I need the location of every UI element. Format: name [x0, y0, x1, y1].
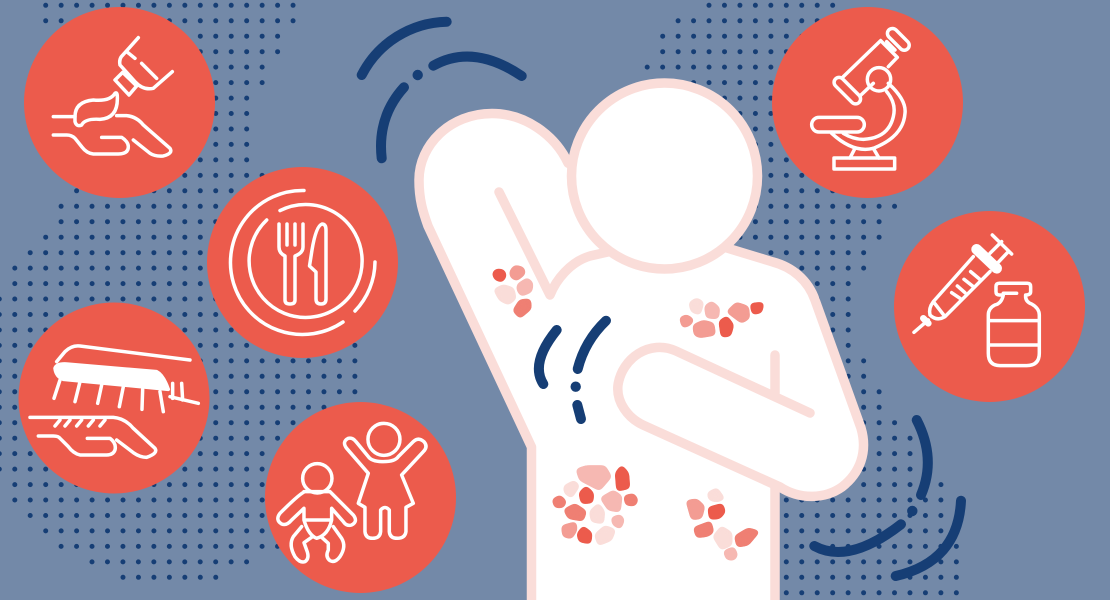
- motion arcs: lower right: [814, 420, 961, 576]
- dot pattern: right map: [647, 5, 959, 593]
- raised arm inner line: [499, 192, 612, 295]
- figure: person scratching: [419, 83, 864, 600]
- icon circle: injection: [894, 211, 1085, 402]
- skin patches: left belly: [554, 467, 637, 544]
- icon circle: children: [265, 402, 456, 593]
- icon: tube and hand: [53, 38, 172, 156]
- icon: microscope: [812, 26, 911, 169]
- icon: brush and hand: [30, 346, 198, 457]
- icon circle: diet: [207, 167, 398, 358]
- head: [572, 83, 758, 269]
- motion arcs: above raised arm: [362, 22, 522, 158]
- forearm across chest: [618, 347, 810, 487]
- skin patches: right belly: [688, 489, 758, 559]
- motion arcs: armpit: [539, 321, 606, 419]
- icon: girl and baby: [278, 423, 426, 562]
- icon: plate, fork and knife: [230, 190, 375, 334]
- skin patches: chest: [681, 299, 762, 336]
- dot pattern: left map: [0, 5, 357, 577]
- icon: syringe and vial: [914, 235, 1039, 366]
- body silhouette: [419, 114, 864, 600]
- icon circle: microscope: [772, 7, 963, 198]
- icon circle: cream on hand: [24, 7, 215, 198]
- icon circle: brushing: [18, 302, 210, 494]
- skin patches: upper arm: [494, 267, 532, 317]
